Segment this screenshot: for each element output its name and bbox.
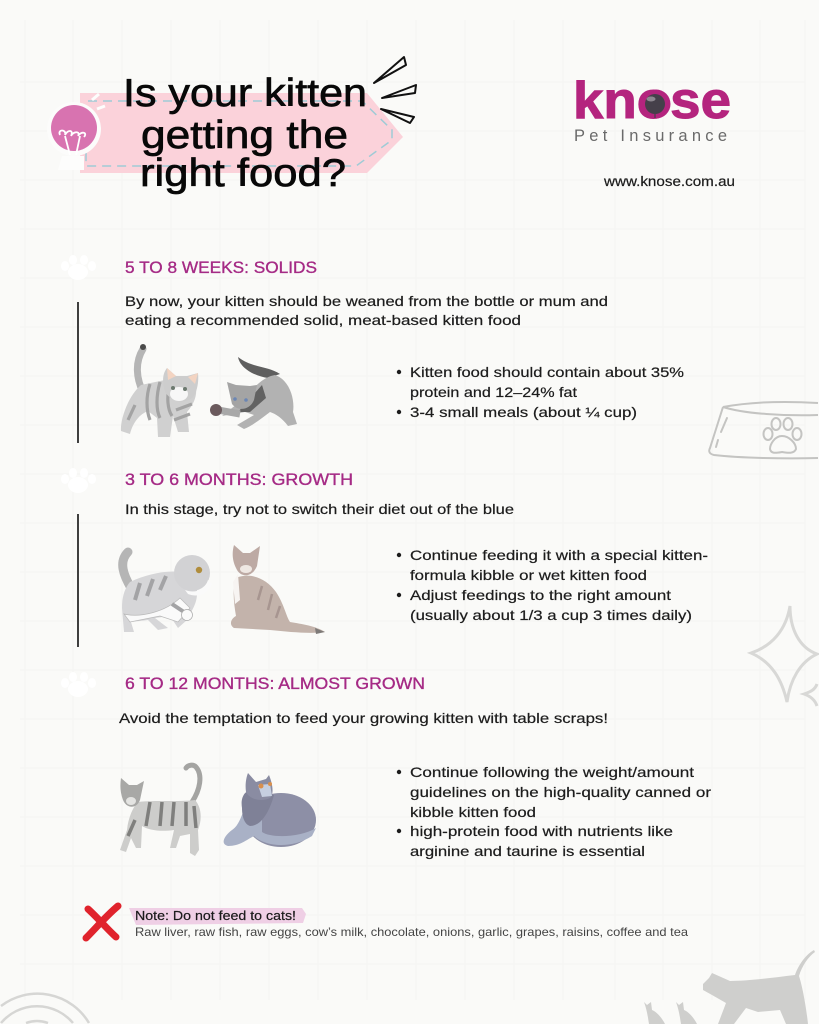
intro text: Avoid the temptation to feed your growing kitten with table scraps!: [119, 710, 608, 726]
illustration: standing tabby kitten: [121, 344, 198, 437]
illustration: blue-grey lying cat: [224, 773, 316, 847]
bullet list: protein and 12–24% fat: [410, 384, 577, 400]
intro text: In this stage, try not to switch their diet out of the blue: [125, 501, 514, 517]
illustration: fold-ear tabby kitten: [122, 552, 212, 632]
decorative concentric arcs: [1, 994, 89, 1023]
intro text: [125, 293, 608, 328]
icon: sparkle stars: [751, 606, 817, 706]
bullet list: (usually about 1/3 a cup 3 times daily): [410, 607, 692, 623]
bullet list: [397, 764, 711, 859]
note heading: Note: Do not feed to cats!: [135, 909, 296, 923]
section: 3 to 6 months: [61, 468, 708, 647]
bullet list: guidelines on the high-quality canned or: [410, 784, 711, 800]
icon: red cross: [86, 906, 118, 938]
section: 5 to 8 weeks: [61, 255, 684, 443]
icon: white paw: [61, 468, 96, 493]
logo: knose pet insurance: Pet Insurance: [574, 127, 727, 145]
bullet list: Adjust feedings to the right amount: [410, 587, 671, 603]
heading: 5 TO 8 WEEKS: SOLIDS: [125, 258, 317, 277]
bullet list: arginine and taurine is essential: [410, 843, 645, 859]
bullet list: kibble kitten food: [410, 804, 536, 820]
bullet list: Continue following the weight/amount: [410, 764, 694, 780]
timeline line: [77, 302, 79, 443]
illustration: striped standing cat: [120, 765, 201, 856]
bullet list: high-protein food with nutrients like: [410, 823, 673, 839]
illustration: tan sitting kitten: [231, 545, 325, 634]
intro text: By now, your kitten should be weaned from the bottle or mum and: [125, 293, 608, 309]
icon: burst of triangles: [374, 57, 416, 123]
silhouette: cat and kittens: [644, 950, 815, 1024]
note: do not feed: [86, 906, 688, 939]
title: getting the: [141, 114, 348, 157]
icon: food bowl: [709, 402, 818, 458]
icon: white paw: [61, 672, 96, 697]
section: 6 to 12 months: [61, 672, 711, 859]
website url: www.knose.com.au: [603, 174, 735, 189]
heading: 3 TO 6 MONTHS: GROWTH: [125, 470, 353, 489]
bullet list: 3-4 small meals (about ¼ cup): [410, 404, 637, 420]
bullet list: [397, 364, 684, 420]
bullet list: [397, 547, 708, 623]
title: right food?: [140, 152, 346, 195]
title banner arrow: [80, 93, 403, 173]
bullet list: formula kibble or wet kitten food: [410, 567, 647, 583]
bullet list: Continue feeding it with a special kitten-: [410, 547, 708, 563]
illustration: playing grey kitten: [210, 357, 297, 429]
logo: knose pet insurance: knose: [573, 72, 731, 130]
title: Is your kitten: [123, 72, 367, 115]
intro text: eating a recommended solid, meat-based kitten food: [125, 312, 521, 328]
note body: Raw liver, raw fish, raw eggs, cow’s milk, chocolate, onions, garlic, grapes, raisins, coffee and tea: [135, 925, 688, 939]
note highlight: [129, 908, 306, 925]
icon: white paw: [61, 255, 96, 280]
icon: light bulb: [47, 94, 105, 170]
bullet list: Kitten food should contain about 35%: [410, 364, 684, 380]
heading: 6 TO 12 MONTHS: ALMOST GROWN: [125, 674, 425, 693]
title: [123, 72, 367, 195]
timeline line: [77, 514, 79, 647]
